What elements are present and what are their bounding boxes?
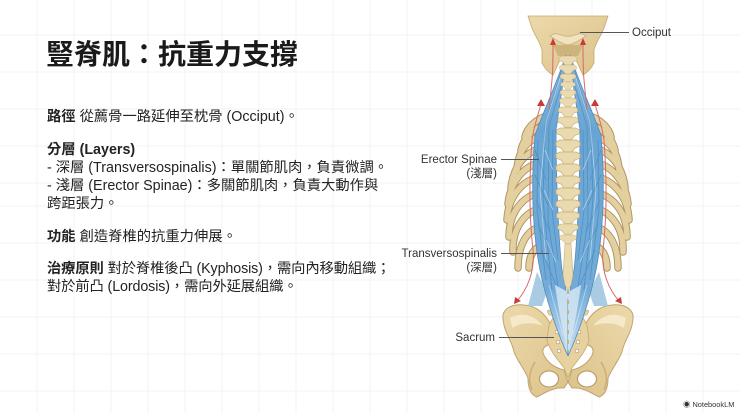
text block: path: 路徑 從薦骨一路延伸至枕骨 (Occiput)。 xyxy=(47,109,299,125)
leader line xyxy=(501,159,539,160)
label text: Transversospinalis xyxy=(402,248,497,260)
layers heading: 分層 (Layers) xyxy=(47,142,135,158)
sacrum xyxy=(547,312,589,378)
text block: treatment principle xyxy=(47,260,390,294)
label text: (淺層) xyxy=(466,168,497,180)
ribs xyxy=(507,116,629,268)
deep layer: - 深層 (Transversospinalis)：單關節肌肉，負責微調。 xyxy=(47,160,388,176)
label: Transversospinalis xyxy=(402,248,549,274)
text block: function: 功能 創造脊椎的抗重力伸展。 xyxy=(47,229,237,245)
pelvis xyxy=(503,305,633,397)
label text xyxy=(402,248,497,274)
label text: Occiput xyxy=(632,27,671,39)
label text: Sacrum xyxy=(455,332,495,344)
text block: treatment principle: 治療原則 對於脊椎後凸 (Kyphosis)，需向內移動組織； xyxy=(47,261,390,277)
superficial layer: - 淺層 (Erector Spinae)：多關節肌肉，負責大動作與 xyxy=(47,178,378,194)
leader line xyxy=(499,337,554,338)
NotebookLM watermark: ◉ NotebookLM xyxy=(683,400,734,409)
spine vertebrae xyxy=(556,56,580,352)
leader line xyxy=(501,253,549,254)
label text xyxy=(421,154,497,180)
text block: layers xyxy=(47,142,388,212)
leader line xyxy=(580,32,629,33)
label text: (深層) xyxy=(466,262,497,274)
red movement arrows xyxy=(514,38,622,304)
text block: treatment principle: 對於前凸 (Lordosis)，需向外延展組織。 xyxy=(47,278,298,294)
label: Erector Spinae xyxy=(421,154,539,180)
superficial layer: 跨距張力。 xyxy=(47,196,118,212)
title: 豎脊肌：抗重力支撐 xyxy=(46,39,298,70)
superficial layer xyxy=(47,178,378,212)
erector spinae and transversospinalis muscles xyxy=(528,55,608,356)
label text: Erector Spinae xyxy=(421,154,497,166)
skull / occiput xyxy=(528,16,608,75)
